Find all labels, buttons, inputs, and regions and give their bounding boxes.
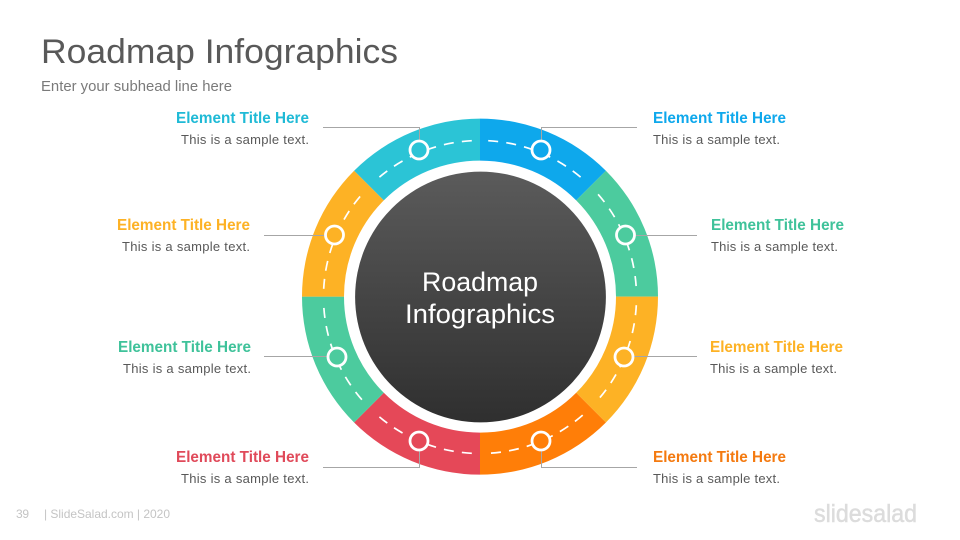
segment: bottom left red — [354, 393, 480, 475]
center label: Roadmap — [422, 267, 538, 297]
title: Roadmap Infographics — [41, 33, 398, 71]
callout: bottom left — [176, 432, 428, 486]
segment: left lower green — [302, 297, 384, 422]
center label: Infographics — [405, 299, 555, 329]
callout: bottom left: This is a sample text. — [181, 471, 309, 486]
callout: top right: Element Title Here — [653, 110, 786, 127]
segment: left upper yellow — [302, 171, 384, 297]
callout: top left — [176, 110, 428, 159]
callout: lower right: This is a sample text. — [710, 361, 837, 376]
callout: upper left — [117, 217, 344, 254]
callout: upper right — [616, 217, 844, 254]
segment: bottom right orange — [480, 393, 606, 475]
callout: upper left: This is a sample text. — [122, 239, 250, 254]
logo: slidesalad — [814, 500, 917, 528]
segment: right lower yellow — [576, 297, 658, 422]
subhead: Enter your subhead line here — [41, 78, 232, 95]
callout: bottom right: This is a sample text. — [653, 471, 780, 486]
callout: upper right: This is a sample text. — [711, 239, 838, 254]
callout: lower left: Element Title Here — [118, 339, 251, 356]
center circle — [355, 172, 606, 422]
callout: bottom right — [532, 432, 786, 486]
callout: bottom right: Element Title Here — [653, 449, 786, 466]
callout: lower left — [118, 339, 346, 376]
center label — [405, 267, 555, 329]
footer: 39 — [16, 507, 29, 521]
segment: right upper green — [576, 171, 658, 297]
callout: bottom left: Element Title Here — [176, 449, 309, 466]
callout: upper right: Element Title Here — [711, 217, 844, 234]
callout: top left: This is a sample text. — [181, 132, 309, 147]
callout: lower left: This is a sample text. — [123, 361, 251, 376]
callout: top right: This is a sample text. — [653, 132, 780, 147]
dashed route — [324, 141, 636, 453]
callout: lower right — [615, 339, 843, 376]
segment: top left cyan — [354, 119, 480, 200]
callout: upper left: Element Title Here — [117, 217, 250, 234]
segment: top right blue — [480, 119, 606, 200]
callout: top right — [532, 110, 786, 159]
footer: | SlideSalad.com | 2020 — [44, 507, 170, 521]
ring diagram — [302, 119, 658, 475]
callout: top left: Element Title Here — [176, 110, 309, 127]
callout: lower right: Element Title Here — [710, 339, 843, 356]
